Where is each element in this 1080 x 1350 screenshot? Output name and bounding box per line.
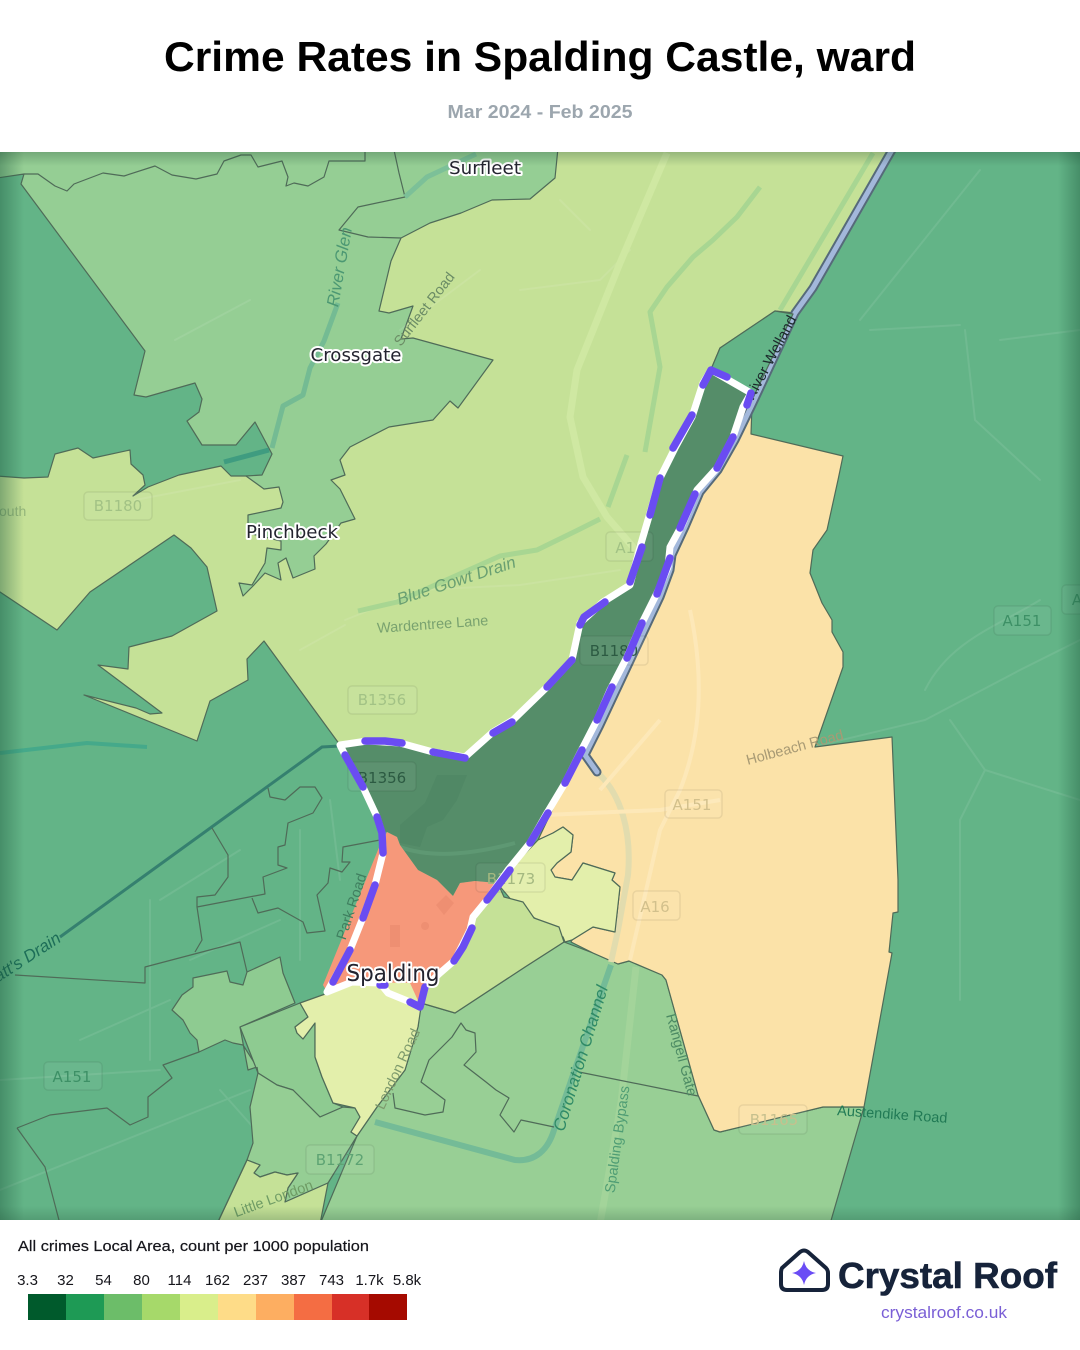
label: park road: Park Road: [334, 872, 370, 942]
shield: A partial: [1062, 585, 1080, 614]
shield: A151 west: [44, 1062, 102, 1090]
label: surfleet: Surfleet: [449, 158, 521, 179]
shield: B1356 north: B1356: [358, 691, 406, 709]
southern neighbourhood boundaries: [393, 1023, 698, 1132]
label: crossgate: Crossgate: [310, 345, 402, 366]
area: orange eastern zone: [538, 405, 898, 1132]
shield: B1172: B1172: [316, 1151, 364, 1169]
map panel: [0, 148, 1080, 1224]
ward detail: town-centre blocks: [390, 895, 454, 947]
legend values: 32: [57, 1272, 74, 1289]
shield: A16 south: [633, 891, 680, 920]
shield: A151 east: A151: [1003, 612, 1041, 630]
legend values: 237: [243, 1272, 268, 1289]
area: mid green south-west: [240, 1003, 343, 1117]
label: little london: Little London: [232, 1178, 315, 1221]
road shields: [44, 492, 1080, 1174]
shield: B1356 north: [348, 686, 417, 714]
shield: A16 north: [606, 532, 653, 561]
ward fill: salmon town-centre section: [323, 832, 497, 1005]
shield: B1356 ward: B1356: [358, 769, 406, 787]
roads within orange zone: [545, 610, 720, 960]
area: river glen: [272, 303, 338, 448]
logo: crystal roof: [781, 1250, 1058, 1322]
river welland: [585, 150, 892, 772]
legend values: 80: [133, 1272, 150, 1289]
channel: eastern drains: [358, 153, 873, 611]
label: pinchbeck: Pinchbeck: [246, 522, 339, 543]
logo wordmark: Crystal Roof: [838, 1255, 1058, 1296]
road and water labels: [0, 226, 948, 1221]
road: spalding bypass: [600, 967, 636, 1224]
shield: A16 south: A16: [640, 898, 670, 916]
label: spalding: Spalding: [346, 961, 440, 987]
area: yellow-green east of town: [421, 888, 564, 1013]
shield: A16 north: A16: [615, 539, 645, 557]
shield: B1173: B1173: [487, 870, 535, 888]
channel: upper river glen: [405, 154, 476, 197]
label: river welland: River Welland: [742, 313, 800, 403]
shield: B1172: [306, 1145, 374, 1174]
shield: A151 west: A151: [53, 1068, 91, 1086]
shield: B1180 ward: B1180: [590, 642, 638, 660]
label: river glen: River Glen: [323, 226, 356, 308]
area: pale patch east of town: [497, 827, 620, 942]
area: west lobe of mid green: [172, 957, 295, 1070]
channel: south forty foot drain: [0, 743, 147, 753]
label: blue gowt drain: Blue Gowt Drain: [395, 553, 518, 609]
legend values: 3.3: [17, 1272, 38, 1289]
shield: A151 town: A151: [673, 796, 711, 814]
legend colour scale: [28, 1294, 407, 1320]
label: holbeach road: Holbeach Road: [745, 727, 845, 769]
ward detail: faint road: [400, 843, 515, 854]
shield: B1356 ward: [348, 762, 416, 791]
shield: B1165: B1165: [750, 1111, 798, 1129]
legend values: [17, 1272, 422, 1289]
legend values: 743: [319, 1272, 344, 1289]
legend values: 5.8k: [393, 1272, 422, 1289]
label: wardentree lane: Wardentree Lane: [377, 613, 489, 637]
legend values: 1.7k: [355, 1272, 384, 1289]
legend: [17, 1272, 422, 1320]
map edge shading: [0, 152, 1080, 1220]
area: mid-green northern zone: [0, 148, 558, 596]
shield: B1180 west: B1180: [94, 497, 142, 515]
legend title: All crimes Local Area, count per 1000 population: [18, 1238, 369, 1255]
legend values: 54: [95, 1272, 112, 1289]
subtitle: date range: Mar 2024 - Feb 2025: [448, 102, 632, 122]
road: A16 north: [570, 153, 667, 555]
area: north-east dark tip beside ward: [712, 311, 793, 400]
logo url: crystalroof.co.uk: [881, 1304, 1008, 1322]
shield: B1173: [476, 863, 545, 892]
icon: house with star: [781, 1250, 828, 1290]
shield: A151 town: [665, 790, 722, 818]
northern boundary lines: [24, 150, 405, 238]
area: mid green below: [247, 1073, 360, 1202]
shield: B1165: [739, 1105, 807, 1134]
label: austendike road: Austendike Road: [837, 1103, 948, 1127]
legend values: 114: [168, 1272, 191, 1289]
area: mid-green south zone: [320, 942, 864, 1224]
label: london road: London Road: [373, 1026, 424, 1112]
title: Crime Rates in Spalding Castle, ward: [164, 33, 916, 80]
area: little london yellow-green: [217, 1160, 328, 1224]
area: pale london road zone: [295, 980, 424, 1136]
shield: B1180 west: [84, 492, 152, 520]
label: rangell gate: Rangell Gate: [662, 1012, 700, 1098]
label: surfleet road: Surfleet Road: [391, 270, 458, 349]
channel: coronation channel: [375, 965, 611, 1160]
area: yellow-green northern zone: [0, 148, 892, 757]
town labels: [246, 158, 521, 987]
ward outline: purple dashes: [333, 370, 751, 1007]
channel: vernatt's drain: [60, 746, 340, 937]
shield: A151 east: [994, 606, 1051, 635]
ward detail: darker building blocks: [400, 775, 467, 847]
ward outline: white: [327, 370, 751, 1007]
shield: B1180 ward: [580, 636, 648, 665]
channel: teal crossing: [224, 450, 269, 462]
label: coronation channel: Coronation Channel: [550, 982, 612, 1133]
south-west neighbourhood boundaries: [15, 787, 380, 1224]
legend values: 387: [281, 1272, 306, 1289]
label: spalding bypass: Spalding Bypass: [603, 1085, 633, 1194]
base area: dark green low-crime zone: [0, 152, 1080, 1220]
road: A16 through orange zone: [600, 775, 629, 962]
legend values: 162: [205, 1272, 230, 1289]
minor roads: [0, 170, 1080, 1190]
ward fill: dark green section: [340, 370, 751, 896]
